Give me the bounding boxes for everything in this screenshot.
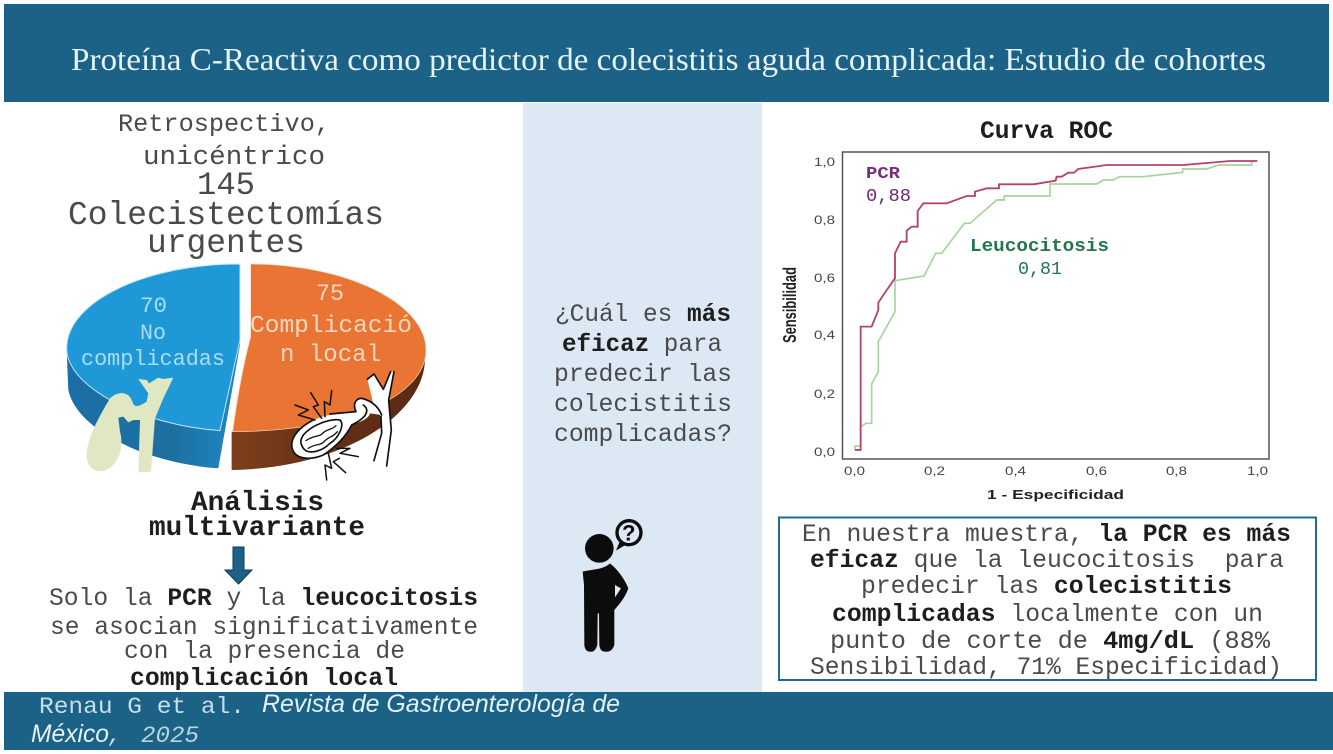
- x axis ticks: 0,6: [1086, 466, 1107, 478]
- footer banner: [4, 690, 1333, 750]
- x axis ticks: 0,4: [1005, 466, 1027, 478]
- blue side: [67, 340, 240, 468]
- panel: research question: [523, 103, 762, 692]
- citation: [31, 690, 620, 749]
- citation: Renau G et al.: [39, 694, 245, 720]
- multivariate result text: complicación local: [130, 665, 398, 693]
- panel: study design: [49, 110, 478, 693]
- callout: conclusion: predecir las colecistitis: [861, 573, 1232, 601]
- x axis ticks: [844, 466, 1268, 478]
- multivariate result text: Solo la PCR y la leucocitosis: [49, 586, 478, 613]
- heading: multivariate analysis: multivariante: [149, 513, 365, 544]
- multivariate result text: [49, 586, 478, 693]
- heading: multivariate analysis: Análisis: [191, 488, 324, 519]
- label: leucocitosis AUC: [970, 237, 1109, 280]
- multivariate result text: se asocian significativamente: [50, 615, 478, 642]
- study description text: Colecistectomías: [68, 197, 384, 234]
- question text: colecistitis: [554, 391, 732, 419]
- pie chart: 70 vs 75: 70: [140, 293, 167, 319]
- y axis ticks: 0,4: [814, 330, 836, 342]
- study description text: 145: [197, 167, 255, 204]
- icon: healthy gallbladder: [87, 378, 173, 472]
- pie chart: 70 vs 75: complicadas: [81, 347, 225, 372]
- x axis label: 1 - Especificidad: [987, 487, 1124, 502]
- x axis ticks: 0,8: [1166, 466, 1187, 478]
- label: PCR AUC: [866, 165, 911, 207]
- callout: conclusion: [779, 518, 1316, 682]
- callout: conclusion: punto de corte de 4mg/dL (88%: [830, 628, 1270, 656]
- question text: [554, 301, 732, 449]
- y axis ticks: 1,0: [814, 157, 835, 169]
- blue top: [67, 264, 240, 431]
- label: leucocitosis AUC: Leucocitosis: [970, 237, 1109, 257]
- multivariate result text: con la presencia de: [124, 639, 405, 666]
- callout: conclusion: En nuestra muestra, la PCR es más: [802, 521, 1291, 549]
- pie chart: 70 vs 75: Complicació: [250, 313, 412, 340]
- y axis ticks: 0,0: [814, 447, 835, 459]
- pie chart: 70 vs 75: 75: [316, 281, 344, 307]
- pie chart: 70 vs 75: No: [140, 321, 166, 346]
- question text: predecir las: [554, 361, 732, 389]
- callout: conclusion: eficaz que la leucocitosis para: [810, 547, 1284, 575]
- line chart: ROC curves: [780, 152, 1269, 502]
- question text: complicadas?: [554, 421, 732, 449]
- x axis ticks: 0,0: [844, 466, 865, 478]
- title: Proteína C-Reactiva como predictor de colecistitis aguda complicada: Estudio de cohortes: [71, 41, 1266, 77]
- leucocitosis curve: [855, 161, 1257, 450]
- citation: 2025: [141, 723, 199, 749]
- label: PCR AUC: 0,88: [866, 187, 911, 207]
- icon: thinking person: ?: [622, 521, 635, 546]
- icon: thinking person: [583, 521, 641, 652]
- study description text: Retrospectivo,: [118, 110, 330, 139]
- y axis ticks: [814, 157, 836, 459]
- y axis ticks: 0,8: [814, 215, 835, 227]
- x axis ticks: 1,0: [1247, 466, 1268, 478]
- citation: Revista de Gastroenterología de: [262, 690, 620, 718]
- heading: multivariate analysis: [149, 488, 365, 544]
- question text: eficaz para: [562, 331, 722, 359]
- header banner: [4, 4, 1329, 102]
- y axis ticks: 0,6: [814, 273, 835, 285]
- brown side: [232, 360, 425, 470]
- label: PCR AUC: PCR: [866, 165, 901, 184]
- study description text: [68, 110, 384, 262]
- chart title: Curva ROC: [980, 118, 1113, 146]
- callout: conclusion: Sensibilidad, 71% Especificidad): [810, 654, 1282, 682]
- arrow: down: [225, 547, 252, 584]
- citation: México: [31, 720, 109, 748]
- callout: conclusion: complicadas localmente con un: [832, 601, 1263, 629]
- x axis ticks: 0,2: [924, 466, 945, 478]
- panel: ROC curve: [779, 118, 1316, 682]
- pie chart: 70 vs 75: n local: [280, 342, 381, 369]
- icon: inflamed gallbladder: [292, 372, 394, 480]
- orange top: [233, 264, 426, 432]
- citation: ,: [108, 723, 122, 749]
- PCR curve: [855, 161, 1257, 450]
- question text: ¿Cuál es más: [555, 301, 731, 329]
- study description text: unicéntrico: [143, 143, 325, 173]
- y axis ticks: 0,2: [814, 389, 835, 401]
- y axis label: Sensibilidad: [780, 267, 800, 343]
- study description text: urgentes: [147, 225, 305, 262]
- pie chart: 70 vs 75: [67, 264, 426, 470]
- label: leucocitosis AUC: 0,81: [1018, 260, 1062, 280]
